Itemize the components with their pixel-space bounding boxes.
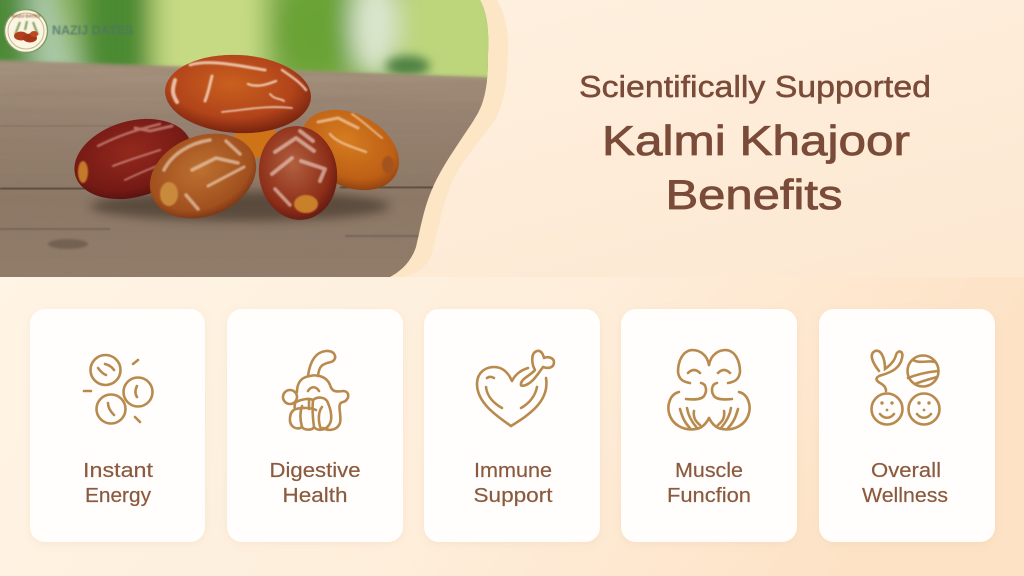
title (579, 69, 931, 218)
date shadows (90, 191, 390, 221)
label: Energy (85, 484, 152, 507)
label: Overall (871, 459, 941, 482)
label: Support (474, 484, 553, 507)
panel: Immune Support (424, 309, 600, 542)
label: Immune (474, 459, 552, 482)
panel: Instant Energy (30, 309, 205, 542)
date: right orange (304, 110, 399, 190)
icon: energy cells (84, 355, 152, 424)
date: left dark red (74, 118, 189, 200)
date: small orange behind (234, 129, 276, 158)
date: top large (165, 54, 311, 134)
icon: wellness symbols (872, 351, 940, 424)
title line 2: Kalmi Khajoor (602, 117, 910, 164)
label (83, 459, 153, 507)
label: Wellness (862, 484, 948, 507)
background: top panel (0, 0, 1024, 278)
panel: Overall Wellness (819, 309, 995, 542)
logo badge (4, 10, 48, 52)
date: front right (258, 126, 338, 220)
label: Health (282, 484, 348, 507)
title line 3: Benefits (666, 171, 842, 218)
label: Digestive (270, 459, 360, 482)
label: Funcfion (667, 484, 751, 507)
label (474, 459, 553, 507)
icon: heart with drumstick (477, 351, 554, 426)
logo badge: NAZIJ DATES (11, 14, 41, 18)
title line 1: Scientifically Supported (579, 69, 931, 104)
icon: muscle and brain shape (668, 350, 750, 429)
photo background foliage (0, 0, 510, 100)
date: front left (150, 134, 256, 218)
background: bottom band (0, 277, 1024, 576)
icon: smiley facial features (880, 401, 931, 411)
wave border behind photo (385, 0, 508, 277)
label (862, 459, 948, 507)
panel: Digestive Health (227, 309, 403, 542)
wooden table (0, 58, 488, 277)
logo wordmark: NAZIJ DATES (52, 22, 133, 38)
icon: digestive system (283, 351, 348, 430)
label: Instant (83, 459, 153, 482)
label (667, 459, 751, 507)
photo: dates on a wooden table (0, 0, 510, 290)
panel: Muscle Function (621, 309, 797, 542)
label (270, 459, 360, 507)
label: Muscle (675, 459, 743, 482)
